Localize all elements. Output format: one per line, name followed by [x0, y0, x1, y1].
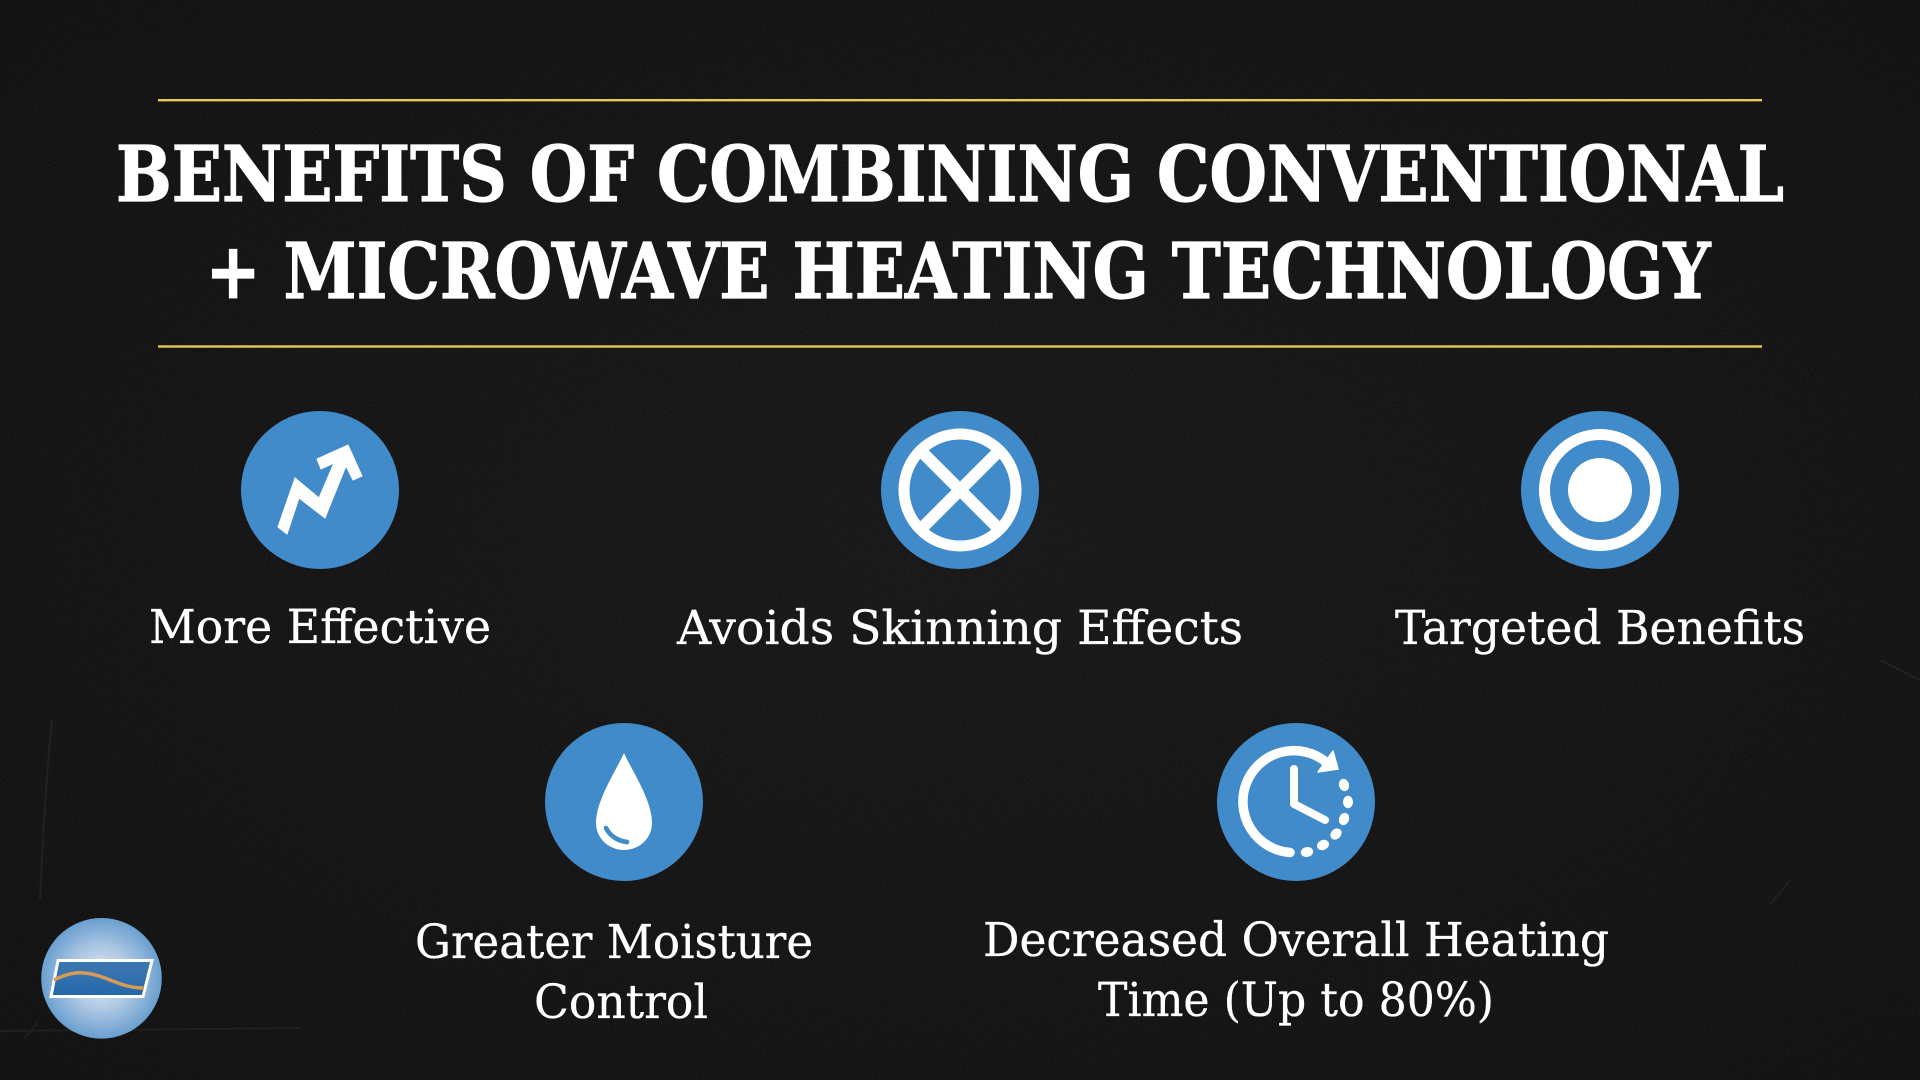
label: Decreased Overall Heating: [983, 913, 1609, 968]
item: Greater Moisture Control: [415, 723, 813, 1030]
title: + MICROWAVE HEATING TECHNOLOGY: [206, 227, 1711, 317]
icon: target: [1521, 411, 1679, 569]
label: Targeted Benefits: [1395, 601, 1805, 656]
logo badge: [41, 918, 162, 1039]
label: More Effective: [149, 600, 491, 655]
item: Targeted Benefits: [1395, 411, 1805, 656]
label: Avoids Skinning Effects: [676, 601, 1243, 656]
label: [415, 915, 813, 1030]
label: Greater Moisture: [415, 915, 813, 970]
divider: top rule: [158, 99, 1762, 101]
item: More Effective: [149, 411, 491, 655]
item: Decreased Overall Heating Time: [983, 723, 1609, 1028]
divider: bottom rule: [158, 345, 1762, 348]
item: Avoids Skinning Effects: [676, 411, 1243, 656]
icon: water drop: [545, 723, 703, 881]
icon: rising arrow: [241, 411, 399, 569]
label: Control: [534, 975, 708, 1030]
icon: crossed circle: [881, 411, 1039, 569]
icon: clock with arrow: [1217, 723, 1375, 881]
label: [983, 913, 1609, 1028]
label: Time (Up to 80%): [1098, 973, 1494, 1028]
title: [116, 130, 1784, 317]
